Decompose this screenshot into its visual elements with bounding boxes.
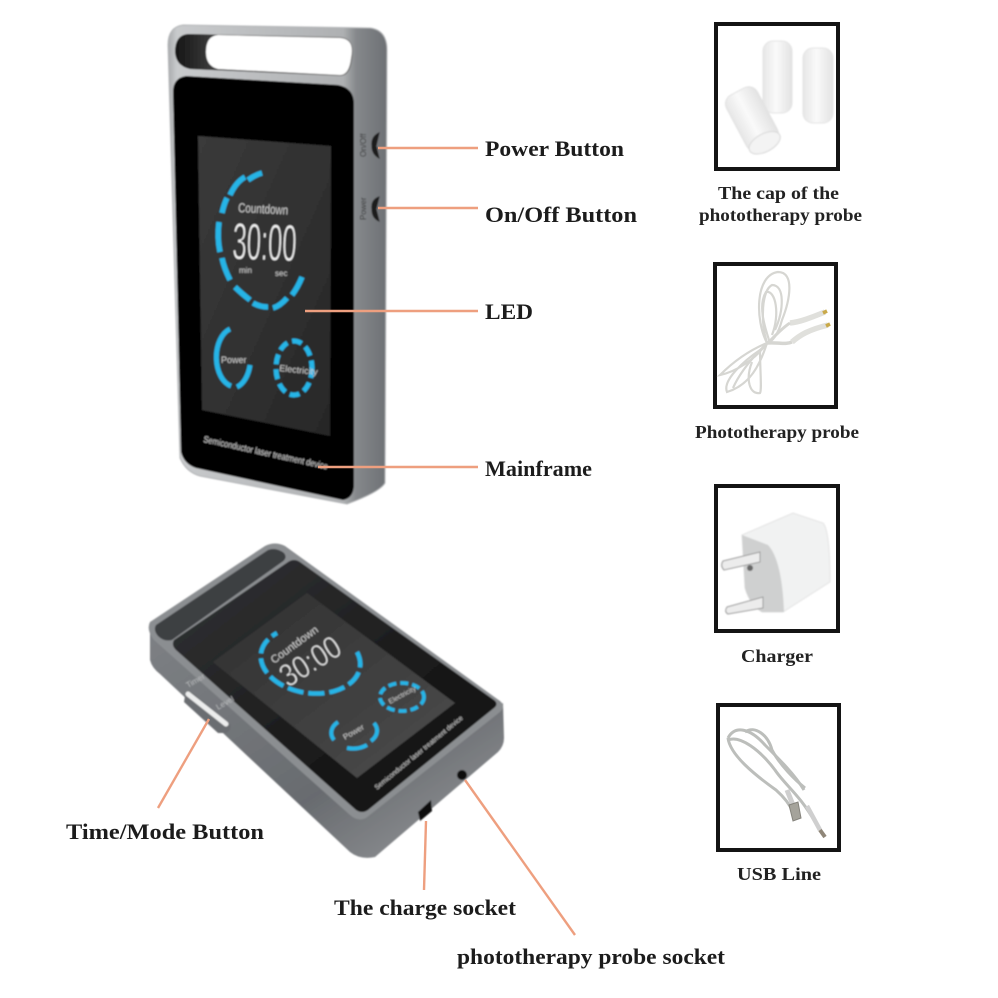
charge socket: [418, 800, 432, 821]
side buttons: On/Off: [359, 133, 368, 157]
device: front view mainframe: [168, 25, 387, 504]
electricity gauge: [276, 341, 319, 395]
device caption: Semiconductor laser treatment device: [203, 434, 329, 471]
time mode rocker button: [184, 672, 236, 733]
black front panel: [173, 76, 354, 500]
caption: cap of the probe: The cap of the: [718, 183, 839, 203]
device caption: Semiconductor laser treatment device: [374, 715, 465, 792]
side buttons: [359, 133, 379, 221]
device: angled view: [149, 544, 504, 858]
accessory: charger: [716, 486, 838, 631]
electricity gauge: Electricity: [388, 685, 418, 706]
label: Time/Mode Button: Time/Mode Button: [66, 819, 264, 844]
black face: [173, 560, 496, 812]
cap illustration: [722, 41, 833, 159]
frame: [715, 264, 836, 407]
frame: [716, 24, 838, 169]
electricity gauge: Electricity: [279, 363, 319, 377]
power gauge: [216, 329, 250, 387]
frame: [716, 486, 838, 631]
label: Mainframe: Mainframe: [485, 456, 592, 481]
time mode rocker button: Level: [214, 694, 236, 712]
caption: phototherapy probe: Phototherapy probe: [695, 422, 859, 442]
charger illustration: [722, 513, 830, 614]
LED screen: [198, 136, 331, 436]
sec label: sec: [275, 269, 287, 278]
electricity gauge: [380, 683, 424, 711]
leader lines: [158, 148, 575, 935]
label: The charge socket: The charge socket: [334, 895, 517, 920]
label: Power Button: Power Button: [485, 136, 624, 161]
side buttons: Power: [359, 197, 368, 220]
caption: USB line: USB Line: [737, 864, 821, 884]
countdown ring: [218, 173, 302, 308]
probe slot: [155, 549, 286, 640]
label: On/Off Button: On/Off Button: [485, 202, 637, 227]
accessory: phototherapy probe: [715, 264, 836, 407]
usb cable illustration: [728, 730, 825, 837]
countdown text: Countdown: [269, 624, 321, 666]
countdown ring: [261, 633, 360, 694]
countdown time: 30:00: [273, 628, 348, 694]
body front faces: [150, 625, 504, 858]
label: LED: LED: [485, 299, 533, 324]
device: front view mainframe: 30:00: [232, 213, 298, 273]
label: phototherapy probe socket: phototherapy probe socket: [457, 944, 726, 969]
accessory: USB line: [718, 705, 839, 850]
power gauge: Power: [221, 355, 247, 365]
accessory: probe cap: [716, 24, 838, 169]
carrying handle opening: [175, 34, 353, 76]
probe socket: [457, 770, 467, 780]
min label: min: [239, 266, 252, 275]
time mode rocker button: Timer: [184, 672, 207, 690]
power gauge: Power: [342, 722, 366, 742]
frame: [718, 705, 839, 850]
caption: cap of the probe: phototherapy probe: [699, 205, 862, 225]
coiled cable illustration: [720, 272, 830, 393]
body top face: [149, 544, 503, 819]
screen: [213, 593, 455, 778]
caption: cap of the probe: [699, 183, 862, 225]
device body: [168, 25, 387, 504]
countdown label: Countdown: [238, 200, 289, 218]
power gauge: [331, 722, 377, 749]
caption: charger: Charger: [741, 646, 813, 666]
